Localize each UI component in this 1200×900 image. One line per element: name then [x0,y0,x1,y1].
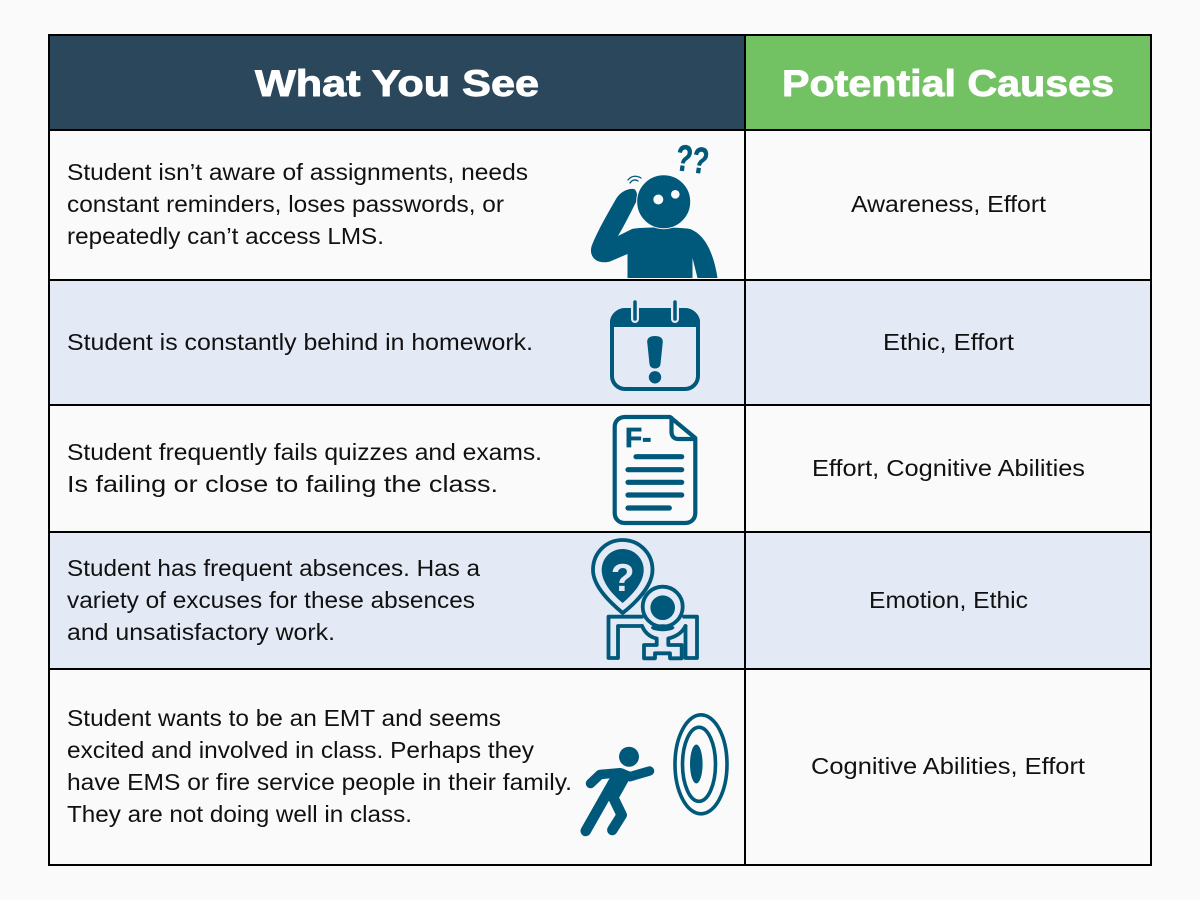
icon: person aiming at target [586,715,727,831]
icon: calendar with exclamation mark [610,302,700,389]
icon: failing test paper [615,417,695,523]
icon: absent student at desk with question pin: ? [611,557,635,600]
row 3 description [67,439,542,497]
icon: failing test paper: F- [625,422,651,453]
row 5 description: excited and involved in class. Perhaps they [67,737,535,763]
row 2 description: Student is constantly behind in homework. [67,329,533,355]
row 1 description: Student isn’t aware of assignments, needs [67,159,528,185]
row 4 description: variety of excuses for these absences [67,587,475,613]
row 3 causes: Effort, Cognitive Abilities [812,455,1085,481]
header: potential causes: Potential Causes [782,63,1114,104]
row 1 description: repeatedly can’t access LMS. [67,223,384,249]
row 5 description: Student wants to be an EMT and seems [67,705,501,731]
header: what you see [48,34,745,130]
icon: confused student [591,137,718,278]
row 1 causes: Awareness, Effort [851,191,1047,217]
row 4 causes: Emotion, Ethic [869,587,1028,613]
row 5 description [67,705,572,827]
row 4 description [67,555,480,645]
row 4 background [48,532,1152,669]
row 4 description: Student has frequent absences. Has a [67,555,480,581]
row 3 description: Is failing or close to failing the class. [67,471,498,497]
row 1 description [67,159,528,249]
header: potential causes [745,34,1152,130]
row 5 description: They are not doing well in class. [67,801,412,827]
row 2 background [48,280,1152,405]
row 1 description: constant reminders, loses passwords, or [67,191,504,217]
row 2 causes: Ethic, Effort [883,329,1015,355]
icon: absent student at desk with question pin [593,540,697,658]
icon: confused student: ?? [673,137,711,182]
row 3 description: Student frequently fails quizzes and exams. [67,439,542,465]
row 4 description: and unsatisfactory work. [67,619,335,645]
row 5 description: have EMS or fire service people in their family. [67,769,572,795]
row 5 causes: Cognitive Abilities, Effort [811,753,1086,779]
header: what you see: What You See [255,63,539,104]
